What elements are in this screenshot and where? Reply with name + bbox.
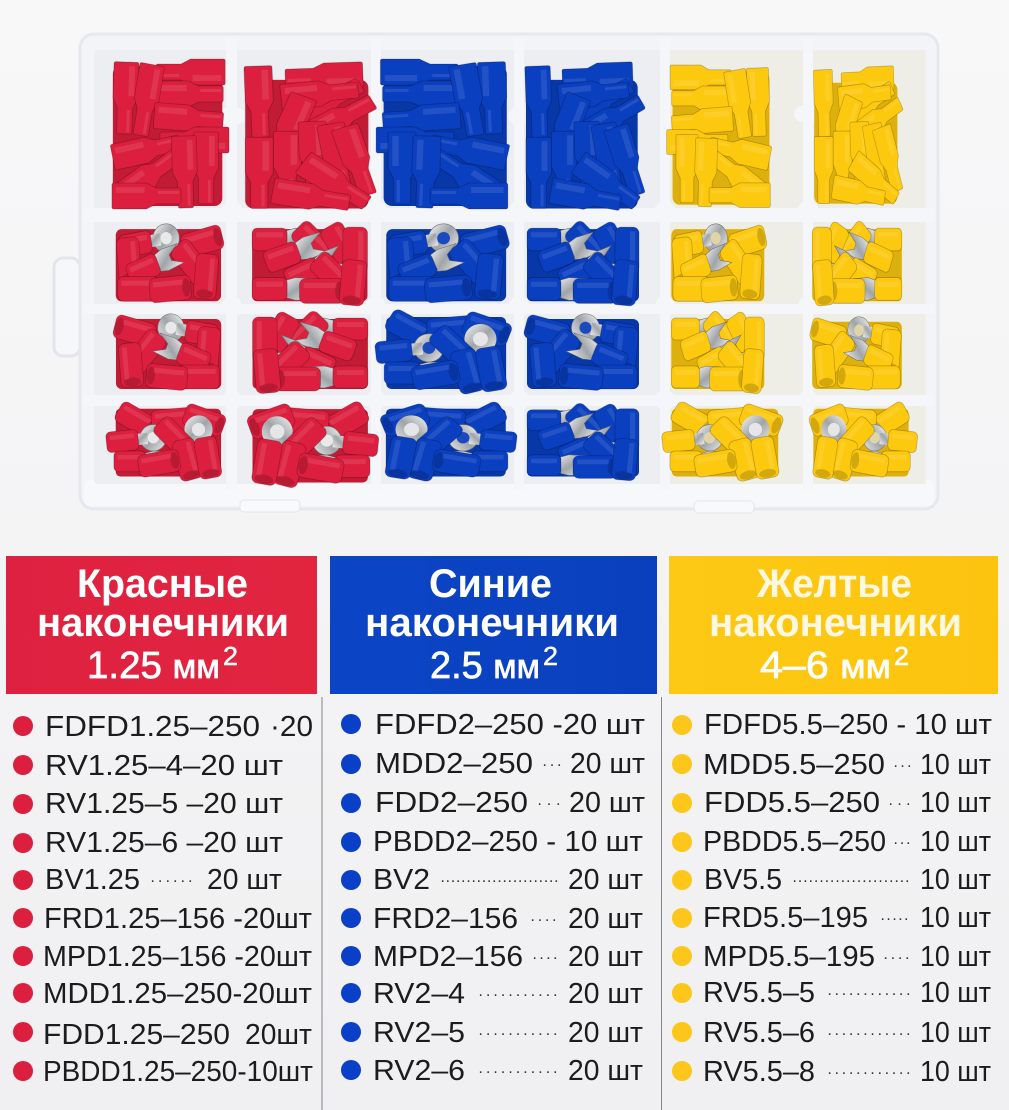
list: blue terminals: ··· [542,756,562,774]
list: blue terminals: 20 шт [569,787,645,819]
list: yellow terminals: 10 шт [920,902,991,934]
list: blue terminals: 20 шт [568,1017,643,1049]
list: yellow terminals: 10 шт [920,1056,991,1088]
blue compartments [374,59,650,482]
panel: yellow header [669,556,998,694]
list: yellow terminals: RV5.5–6 [703,1017,815,1049]
list: blue terminals: RV2–4 [373,978,465,1010]
panel: red header: Красные [77,562,248,606]
list: blue terminals: FDFD2–250 -20 шт [375,709,645,741]
list: yellow terminals: 10 шт [920,749,991,781]
list: red terminals: MPD1.25–156 -20шт [43,941,312,973]
list: blue terminals: FDD2–250 [375,787,528,819]
list: yellow terminals: ····· [880,910,909,928]
list: yellow terminals: 10 шт [920,941,991,973]
panel: red header: 2 [223,641,238,671]
panel: red header [6,556,317,694]
tray body [80,34,938,509]
list: blue terminals: PBDD2–250 - 10 шт [373,826,643,858]
list: red terminals: RV1.25–5 –20 шт [45,788,283,820]
list: blue terminals: ··········· [478,1026,558,1042]
list: yellow terminals: 10 шт [920,977,991,1009]
list: yellow terminals: ······················ [792,872,910,890]
list: blue terminals: MPD2–156 [373,941,523,973]
list: red terminals: 20 шт [207,864,282,896]
list: yellow terminals: FRD5.5–195 [703,902,868,934]
list: yellow terminals: FDD5.5–250 [704,787,880,819]
list: yellow terminals: 10 шт [920,826,991,858]
list: red terminals: MDD1.25–250-20шт [43,978,312,1010]
panel: yellow header: наконечники [709,601,962,645]
panel: yellow header: 2 [894,641,909,671]
list: yellow terminals: ············ [827,1064,911,1082]
list: blue terminals: 20 шт [568,978,643,1010]
list: yellow terminals: 10 шт [920,1017,991,1049]
panel: blue header: 2.5 мм [430,645,540,687]
list: blue terminals [341,709,645,1087]
panel: red header: 1.25 мм [87,645,220,687]
list: blue terminals: 20 шт [568,1055,643,1087]
list: blue terminals: ··········· [478,986,558,1004]
hanging tab on tray [54,258,80,356]
panel: yellow header: 4–6 мм [760,645,891,687]
list: red terminals [13,711,313,1088]
list: blue terminals: ··· [537,796,561,812]
panel: blue header: 2 [543,641,558,671]
column dividers [322,697,662,1110]
panel: blue header [330,556,657,694]
list: yellow terminals: ··· [893,758,912,774]
list: yellow terminals: BV5.5 [704,864,782,896]
list: blue terminals: ···· [530,912,557,928]
list: yellow terminals: ··· [893,834,911,852]
list: red terminals: FDD1.25–250 [43,1019,230,1051]
list: red terminals: FDFD1.25–250 [45,711,260,743]
list: blue terminals: RV2–6 [373,1055,465,1087]
list: blue terminals: FRD2–156 [373,903,518,935]
photo: transparent terminal organizer box [54,34,938,513]
list: red terminals: PBDD1.25–250-10шт [43,1056,313,1088]
list: blue terminals: MDD2–250 [375,748,533,780]
list: red terminals: ······ [150,872,193,890]
tray bottom clips [240,500,754,513]
list: yellow terminals: ··· [888,796,911,812]
list: red terminals: RV1.25–6 –20 шт [45,827,283,859]
list: red terminals: RV1.25–4–20 шт [45,750,283,782]
list: yellow terminals: ············ [827,986,911,1002]
list: blue terminals: ··········· [478,1064,558,1080]
list: yellow terminals: 10 шт [920,864,991,896]
panel: blue header: Синие [429,562,552,606]
list: blue terminals: ···· [532,950,558,966]
list: blue terminals: BV2 [373,864,430,896]
list: blue terminals: ······················· [440,872,559,890]
list: red terminals: 20шт [245,1019,312,1051]
list: yellow terminals: MDD5.5–250 [703,749,885,781]
yellow compartments [661,65,918,482]
tray dividers [84,38,934,490]
list: blue terminals: 20 шт [568,903,643,935]
list: yellow terminals [672,709,992,1088]
list: blue terminals: 20 шт [568,864,643,896]
list: yellow terminals: ············ [827,1026,911,1042]
list: yellow terminals: RV5.5–5 [703,977,815,1009]
list: yellow terminals: FDFD5.5–250 - 10 шт [704,709,992,741]
list: blue terminals: 20 шт [568,941,643,973]
panel: blue header: наконечники [365,601,619,645]
list: blue terminals: 20 шт [570,748,645,780]
list: yellow terminals: MPD5.5–195 [703,941,875,973]
panel: red header: наконечники [37,601,289,645]
list: red terminals: ·20 [270,711,313,743]
red compartments [105,59,382,489]
list: yellow terminals: 10 шт [920,787,991,819]
list: yellow terminals: PBDD5.5–250 [703,826,886,858]
list: yellow terminals: ···· [883,950,910,966]
list: yellow terminals: RV5.5–8 [703,1056,815,1088]
list: red terminals: FRD1.25–156 -20шт [44,903,312,935]
list: red terminals: BV1.25 [45,864,140,896]
panel: yellow header: Желтые [756,562,912,606]
list: blue terminals: RV2–5 [373,1017,465,1049]
